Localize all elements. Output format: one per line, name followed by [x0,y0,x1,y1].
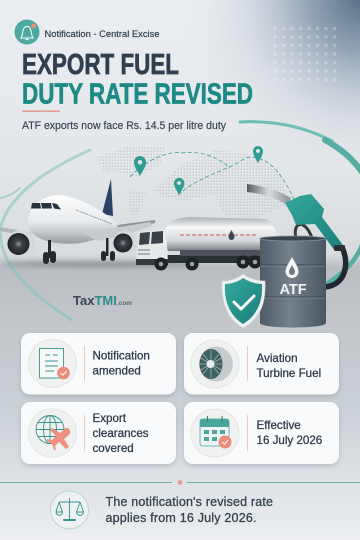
icon: calendar [200,416,232,448]
icon: bell [14,20,40,44]
engines [6,230,36,258]
title: EXPORT FUEL [22,49,179,81]
airplane [0,179,155,264]
barrel label: ATF [279,282,307,298]
card: effective date [184,402,339,464]
card: export clearances covered [21,402,176,464]
card text: covered [92,442,134,455]
title accent line [22,110,60,112]
hero illustration [0,146,346,328]
card text: 16 July 2026 [256,434,322,447]
fuel hose [325,247,346,287]
card text: Export [92,412,127,425]
route lines [130,152,296,205]
logo: TaxTMI.com [73,293,132,308]
icon: globe with plane [36,416,70,450]
fuel tanker truck [136,217,277,270]
ground shadow [0,261,200,267]
dotted world map [95,146,290,218]
icon: fuel drop [286,257,298,278]
badge text: Notification - Central Excise [44,28,160,39]
oil barrel [260,236,326,328]
teal sweeping arc [0,122,360,320]
title: DUTY RATE REVISED [22,78,253,110]
fuel nozzle [247,184,345,251]
title [22,49,253,110]
icon: shield [222,274,265,328]
card: aviation turbine fuel [184,333,339,394]
footer note [50,491,273,529]
card text: amended [92,364,141,378]
icon: turbine [199,346,233,382]
landing gear [43,238,115,264]
notification badge [14,20,160,44]
card text: Notification [92,350,150,362]
footer text: The notification's revised rate [106,495,273,509]
card: notification amended [21,333,176,394]
card text: Effective [256,419,301,432]
card text: Aviation [256,352,298,365]
card text: Turbine Fuel [256,367,321,380]
card text: clearances [92,427,149,440]
subtitle: ATF exports now face Rs. 14.5 per litre duty [22,120,227,132]
icon: document [40,348,70,379]
icon: scales [50,491,88,529]
icon: map pins [134,146,263,195]
footer text: applies from 16 July 2026. [106,511,256,525]
